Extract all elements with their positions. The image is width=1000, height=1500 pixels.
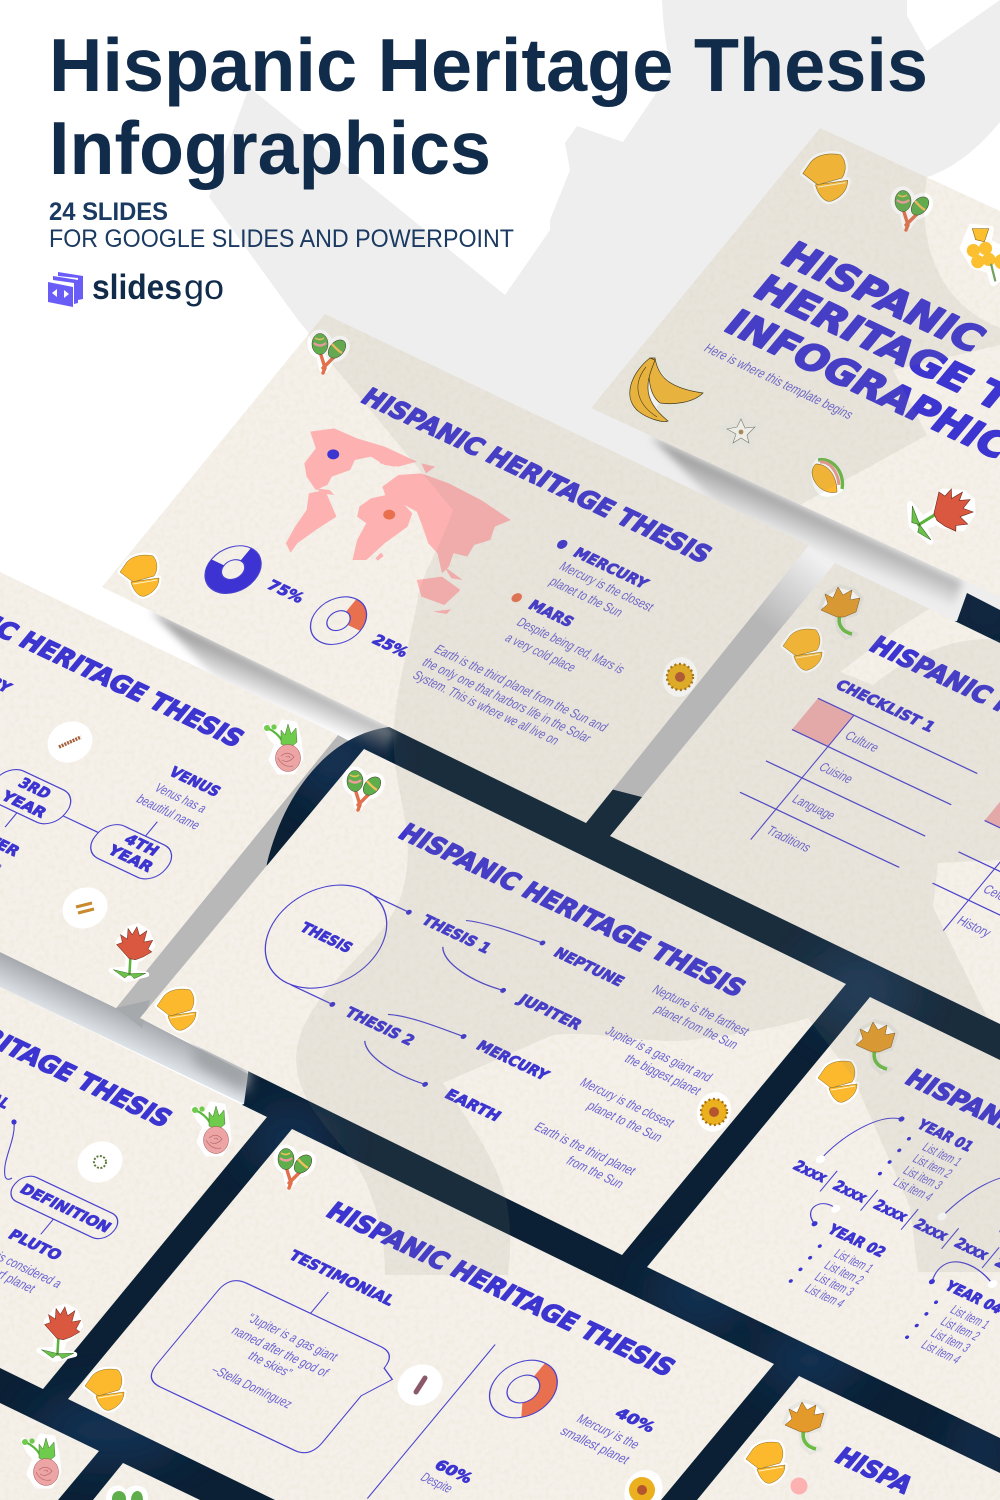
branch labels: JUPITER bbox=[514, 992, 585, 1033]
checklist table 2 bbox=[907, 789, 1000, 989]
year 02 list: List item 1 bbox=[831, 1246, 877, 1276]
checklist table 1 bbox=[715, 698, 977, 898]
branch labels: MERCURY bbox=[472, 1038, 553, 1084]
icon: orange flower bbox=[855, 1021, 897, 1073]
icon: lemon bbox=[157, 989, 196, 1030]
logo wordmark: go bbox=[184, 268, 224, 307]
paragraph: System. This is where we all live on bbox=[410, 668, 563, 748]
timeline year labels: 2xxx bbox=[950, 1236, 992, 1263]
quote: named after the god of bbox=[228, 1323, 333, 1380]
testimonial heading: TESTIMONIAL bbox=[285, 1248, 398, 1309]
soft slide shadows bbox=[150, 436, 962, 1092]
heading block bbox=[48, 23, 928, 307]
year 01 list bbox=[872, 1117, 977, 1204]
icon: maracas bbox=[891, 188, 935, 230]
year 03 list bbox=[998, 1174, 1000, 1256]
checklist table 1: Cuisine bbox=[816, 759, 857, 786]
pluto text bbox=[0, 1218, 83, 1304]
panel: checklist slide bbox=[715, 586, 1000, 989]
subtitle: platforms: FOR GOOGLE SLIDES AND POWERPOINT bbox=[49, 225, 514, 253]
legend: mars: MARS bbox=[525, 598, 577, 630]
quote: –Stella Domínguez bbox=[208, 1362, 296, 1411]
year 01 list: List item 2 bbox=[910, 1151, 956, 1181]
icon: sunflower bbox=[658, 653, 702, 701]
branch labels: THESIS 1 bbox=[418, 913, 494, 957]
panel: years list slide bbox=[719, 1021, 1000, 1431]
icon: orange flower bbox=[820, 586, 862, 638]
label 75%: 75% bbox=[263, 578, 307, 607]
panel: bottom right slide bbox=[746, 1401, 920, 1499]
slide title: HISPANIC HERITAGE THESIS bbox=[355, 383, 718, 568]
divider bbox=[367, 1345, 495, 1498]
icon: maracas, partly cropped bbox=[106, 1486, 148, 1500]
legend: mercury: planet to the Sun bbox=[546, 574, 627, 619]
dark navy backdrop bbox=[0, 580, 1000, 1500]
connector bbox=[41, 1219, 53, 1234]
connector bbox=[311, 1292, 328, 1313]
icon: red flower bbox=[110, 923, 156, 983]
icon: lily bbox=[723, 415, 759, 447]
sticker: fish icon bbox=[56, 880, 114, 936]
jupiter text bbox=[0, 818, 23, 875]
year 02 list: List item 4 bbox=[802, 1281, 848, 1310]
world map bbox=[286, 428, 511, 614]
panel: timeline years slide bbox=[0, 568, 301, 983]
logo wordmark: slides bbox=[92, 268, 182, 307]
descriptions: Neptune is the farthest bbox=[649, 982, 753, 1039]
descriptions: planet from the Sun bbox=[651, 1002, 742, 1052]
speech bubble bbox=[144, 1276, 409, 1464]
legend: mars bbox=[482, 589, 642, 692]
timeline year labels: 2xxx bbox=[910, 1216, 951, 1244]
pill: 3rd year: 3RD bbox=[14, 776, 54, 802]
year 04 list: List item 3 bbox=[928, 1326, 974, 1355]
icon: sunflower, partly cropped bbox=[624, 1470, 662, 1500]
quote: “Jupiter is a gas giant bbox=[244, 1310, 342, 1364]
donut chart 25% bbox=[299, 589, 378, 652]
year 02 list bbox=[782, 1222, 890, 1310]
pill: definition: DEFINITION bbox=[16, 1182, 114, 1236]
descriptions: Jupiter is a gas giant and bbox=[602, 1023, 716, 1084]
icon: orange flower bbox=[784, 1401, 826, 1453]
year 04 list: List item 2 bbox=[937, 1314, 984, 1343]
year 01 list: List item 4 bbox=[890, 1175, 937, 1204]
branch labels: EARTH bbox=[441, 1087, 504, 1125]
main title bbox=[49, 23, 928, 190]
legend: mars: a very cold place bbox=[502, 630, 580, 675]
curved markers bbox=[773, 1099, 1000, 1307]
icon: lemon bbox=[783, 629, 822, 670]
descriptions: Mercury is the closest bbox=[577, 1075, 678, 1130]
panel: testimonial slide bbox=[85, 1146, 681, 1500]
panel: mind map slide bbox=[157, 768, 783, 1192]
icon: maracas bbox=[343, 768, 387, 810]
year 01 list: YEAR 01 bbox=[913, 1117, 976, 1155]
panel: bottom left slide fragments bbox=[22, 1436, 148, 1500]
branch labels: THESIS 2 bbox=[341, 1005, 418, 1049]
icon: yellow flower bbox=[962, 226, 1000, 284]
year 04 list: List item 4 bbox=[918, 1337, 964, 1367]
icon: rose bbox=[264, 722, 301, 772]
icon: lemon bbox=[120, 555, 159, 596]
branch labels bbox=[320, 891, 630, 1130]
pill: 4th year: YEAR bbox=[103, 842, 156, 876]
icon: taco bbox=[809, 456, 846, 499]
stat: 60%: Despite bbox=[417, 1470, 457, 1496]
venus text: Venus has a bbox=[151, 780, 211, 816]
legend: mercury: MERCURY bbox=[569, 545, 652, 592]
icon: lemon bbox=[818, 1061, 857, 1102]
stat: 40%: 40% bbox=[611, 1406, 658, 1436]
pill: definition bbox=[5, 1172, 124, 1243]
sticker: emblem bbox=[71, 1134, 129, 1190]
checklist heading: CHECKLIST 1 bbox=[832, 677, 938, 736]
slide title: HISPANIC HERITAGE THESIS bbox=[392, 818, 752, 1002]
pluto text: PLUTO bbox=[4, 1227, 65, 1264]
panel: definition slide bbox=[0, 948, 229, 1363]
sticker: stick icon bbox=[41, 714, 99, 770]
label 25%: 25% bbox=[368, 632, 411, 661]
pill: 3rd year bbox=[0, 764, 79, 829]
year 01 list: List item 3 bbox=[900, 1163, 946, 1192]
venus text: VENUS bbox=[165, 764, 224, 800]
icon: rose bbox=[192, 1104, 229, 1154]
icon: red flower bbox=[903, 480, 981, 547]
timeline year labels: 2xxx bbox=[829, 1178, 870, 1206]
branch labels: NEPTUNE bbox=[550, 945, 627, 990]
paragraph: Earth is the third planet from the Sun and bbox=[431, 642, 611, 734]
connector dot bbox=[11, 1119, 17, 1125]
quote bbox=[199, 1309, 344, 1415]
descriptions bbox=[514, 978, 755, 1192]
icon: bananas bbox=[630, 358, 703, 422]
checklist table 1: Language bbox=[789, 792, 839, 823]
venus text: beautiful name bbox=[133, 792, 204, 832]
descriptions: the biggest planet bbox=[622, 1051, 705, 1098]
icon: lemon bbox=[85, 1369, 124, 1410]
pill: 4th year bbox=[83, 819, 180, 884]
quote: the skies” bbox=[245, 1348, 296, 1380]
stat: 40%: smallest planet bbox=[557, 1423, 633, 1467]
timeline year labels: 2xxx bbox=[869, 1197, 911, 1225]
checklist table 2: History bbox=[954, 913, 995, 940]
legend: mercury bbox=[529, 537, 670, 629]
descriptions: from the Sun bbox=[563, 1153, 628, 1191]
venus text bbox=[133, 761, 229, 832]
main title: Hispanic Heritage Thesis bbox=[49, 23, 928, 107]
slide title, cropped by page edge: HISPA bbox=[829, 1442, 920, 1499]
timeline year labels bbox=[786, 1155, 1000, 1285]
timeline year labels: 2xxx bbox=[789, 1158, 831, 1186]
icon: rose bbox=[22, 1436, 59, 1486]
map marker: blue bbox=[327, 449, 339, 459]
slide title bbox=[715, 235, 1000, 513]
logo icon bbox=[48, 272, 83, 307]
stat: 60%: 60% bbox=[431, 1457, 476, 1487]
grey shadow strips between slides bbox=[0, 545, 835, 1104]
slide title: HISPANIC HERITAGE THESIS bbox=[320, 1197, 681, 1382]
pill: 4th year: 4TH bbox=[120, 832, 162, 860]
central circle: thesis: THESIS bbox=[296, 920, 356, 956]
icon: maracas bbox=[308, 331, 352, 373]
icon: lemon bbox=[746, 1442, 785, 1483]
connector lines bbox=[5, 799, 98, 860]
icon: red flower bbox=[38, 1303, 84, 1363]
stat: 40%: Mercury is the bbox=[574, 1411, 643, 1452]
stat: 40% bbox=[557, 1392, 659, 1467]
slide title: INFOGRAPHICS bbox=[715, 303, 1000, 479]
year 02 list: List item 3 bbox=[811, 1269, 858, 1299]
icon: lemon bbox=[803, 154, 848, 201]
donut chart 40% bbox=[476, 1351, 571, 1427]
icon: sunflower bbox=[692, 1088, 736, 1136]
central circle: thesis bbox=[241, 868, 411, 1005]
donut chart 75% bbox=[194, 538, 273, 601]
translucent silhouette overlay bbox=[296, 100, 1000, 1275]
sticker: figure bbox=[391, 1357, 449, 1413]
year 02 list: YEAR 02 bbox=[823, 1222, 889, 1261]
year 01 list: List item 1 bbox=[919, 1140, 966, 1169]
branch connectors bbox=[268, 867, 547, 1088]
checklist table 1: Culture bbox=[842, 728, 883, 755]
testimonial block bbox=[144, 1233, 444, 1464]
subtitle: Here is where this template begins bbox=[701, 341, 857, 422]
legend: mars: Despite being red, Mars is bbox=[514, 615, 629, 677]
paragraph: the only one that harbors life in the Solar bbox=[419, 655, 595, 746]
map marker: orange bbox=[383, 510, 395, 520]
panel: title slide bbox=[630, 154, 1000, 547]
descriptions: planet to the Sun bbox=[584, 1098, 666, 1144]
legend: mercury: Mercury is the closest bbox=[556, 559, 658, 614]
year 02 list: List item 2 bbox=[821, 1258, 867, 1287]
connector bbox=[145, 822, 157, 836]
main title: Infographics bbox=[49, 106, 491, 190]
slide title: HISPANIC bbox=[772, 235, 994, 360]
panel: world map slide bbox=[120, 331, 747, 763]
stat: 60% bbox=[417, 1456, 476, 1499]
icon: maracas bbox=[274, 1146, 318, 1188]
subtitle: slide count: 24 SLIDES bbox=[49, 198, 168, 226]
checklist table 1: Traditions bbox=[763, 823, 815, 855]
descriptions: Earth is the third planet bbox=[531, 1119, 640, 1178]
year 04 list bbox=[899, 1278, 1000, 1367]
curved connector bbox=[5, 1122, 14, 1179]
pink dot bbox=[790, 1478, 808, 1494]
